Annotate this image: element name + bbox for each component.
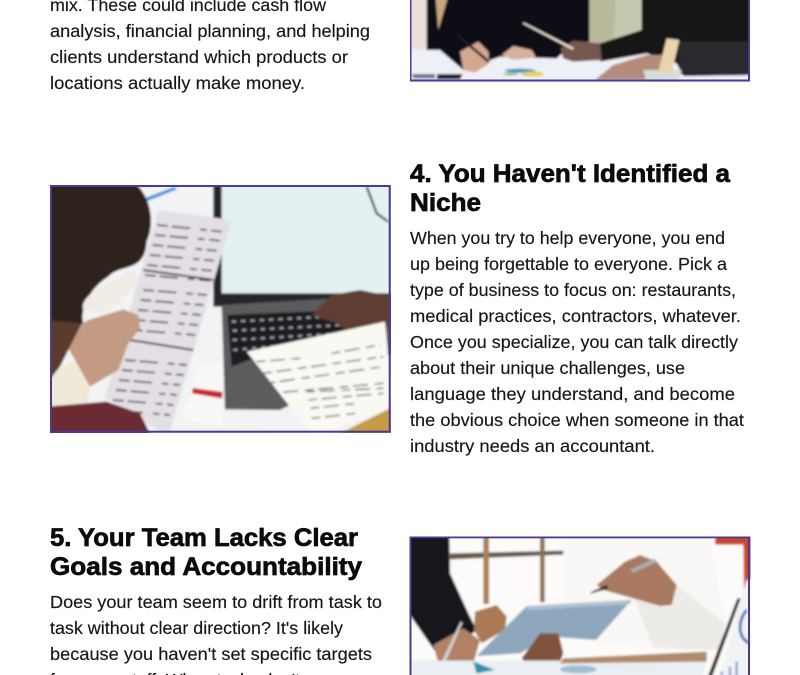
text block: section 4 body	[410, 228, 744, 456]
image frame	[51, 186, 390, 432]
text block: section 4 body: When you try to help everyone, you end	[410, 228, 725, 248]
image: business people reviewing documents at a table	[410, 0, 750, 87]
text block: section 5 body: because you haven't set specific targets	[50, 644, 372, 664]
heading: section 4	[410, 160, 731, 217]
text block: section 4 body: about their unique challenges, use	[410, 358, 685, 378]
heading: section 5: 5. Your Team Lacks Clear	[50, 524, 358, 552]
text block: section 4 body: Once you specialize, you can talk directly	[410, 332, 738, 352]
heading: section 5	[50, 524, 362, 581]
text block: section 4 body: up being forgettable to everyone. Pick a	[410, 254, 727, 274]
text block: section 3 closing text: clients understand which products or	[50, 47, 348, 67]
text block: section 4 body: the obvious choice when someone in that	[410, 410, 744, 430]
heading: section 4: 4. You Haven't Identified a	[410, 160, 731, 188]
text block: section 3 closing text: analysis, financial planning, and helping	[50, 21, 370, 41]
heading: section 4: Niche	[410, 189, 481, 217]
text block: section 4 body: type of business to focus on: restaurants,	[410, 280, 736, 300]
heading: section 5: Goals and Accountability	[50, 553, 362, 581]
text block: section 5 body	[50, 592, 382, 675]
text block: section 4 body: medical practices, contractors, whatever.	[410, 306, 741, 326]
text block: section 3 closing text: locations actually make money.	[50, 73, 305, 93]
text block: section 4 body: industry needs an accountant.	[410, 436, 655, 456]
image: team reviewing charts on a tablet	[405, 532, 755, 675]
image frame	[410, 0, 749, 80]
text block: section 3 closing text	[50, 0, 370, 93]
image: financial papers and laptop	[47, 182, 395, 437]
image frame	[410, 537, 749, 675]
text block: section 5 body: Does your team seem to drift from task to	[50, 592, 382, 612]
text block: section 5 body: task without clear direction? It's likely	[50, 618, 343, 638]
text block: section 4 body: language they understand, and become	[410, 384, 735, 404]
